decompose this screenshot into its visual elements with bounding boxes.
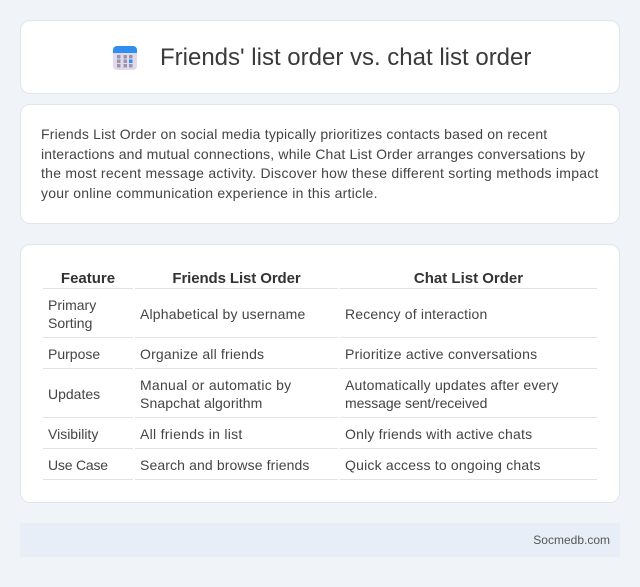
header: Friends List Order: Friends List Order xyxy=(172,270,301,287)
intro text card xyxy=(20,104,620,224)
footer bar xyxy=(20,523,620,557)
row: updates chat xyxy=(345,377,559,411)
intro paragraph: the most recent message activity. Discover how these different sorting methods impact xyxy=(41,165,599,181)
intro paragraph: Friends List Order on social media typically prioritizes contacts based on recent xyxy=(41,126,547,142)
row: updates chat: message sent/received xyxy=(345,395,487,411)
row: use case chat: Quick access to ongoing chats xyxy=(345,457,541,473)
intro paragraph: your online communication experience in this article. xyxy=(41,184,378,200)
row: updates friends xyxy=(140,377,292,411)
row: visibility chat: Only friends with active chats xyxy=(345,426,532,442)
row: use case friends: Search and browse friends xyxy=(140,457,310,473)
header: Feature: Feature xyxy=(61,270,115,287)
row: updates feature: Updates xyxy=(48,386,100,402)
row: visibility friends: All friends in list xyxy=(140,426,243,442)
row: primary sorting chat: Recency of interaction xyxy=(345,306,487,322)
comparison table card xyxy=(20,244,620,503)
row: primary sorting friends: Alphabetical by username xyxy=(140,306,305,322)
row: updates chat: Automatically updates after every xyxy=(345,377,559,393)
row: primary sorting feature: Primary xyxy=(48,297,96,313)
row: primary sorting feature: Sorting xyxy=(48,315,92,331)
intro paragraph: interactions and mutual connections, while Chat List Order arranges conversations by xyxy=(41,146,585,162)
row: updates friends: Snapchat algorithm xyxy=(140,395,262,411)
title: Friends' list order vs. chat list order xyxy=(160,44,531,71)
row: visibility feature: Visibility xyxy=(48,426,98,442)
header: Chat List Order: Chat List Order xyxy=(414,270,523,287)
row: use case feature: Use Case xyxy=(48,457,108,473)
row: primary sorting feature xyxy=(48,297,96,331)
row: purpose chat: Prioritize active conversations xyxy=(345,346,537,362)
row: purpose feature: Purpose xyxy=(48,346,100,362)
row: purpose friends: Organize all friends xyxy=(140,346,264,362)
row: updates friends: Manual or automatic by xyxy=(140,377,291,393)
icon: calendar xyxy=(113,46,137,70)
intro paragraph xyxy=(41,126,599,201)
footer source: Socmedb.com xyxy=(533,533,610,547)
header card xyxy=(20,20,620,94)
